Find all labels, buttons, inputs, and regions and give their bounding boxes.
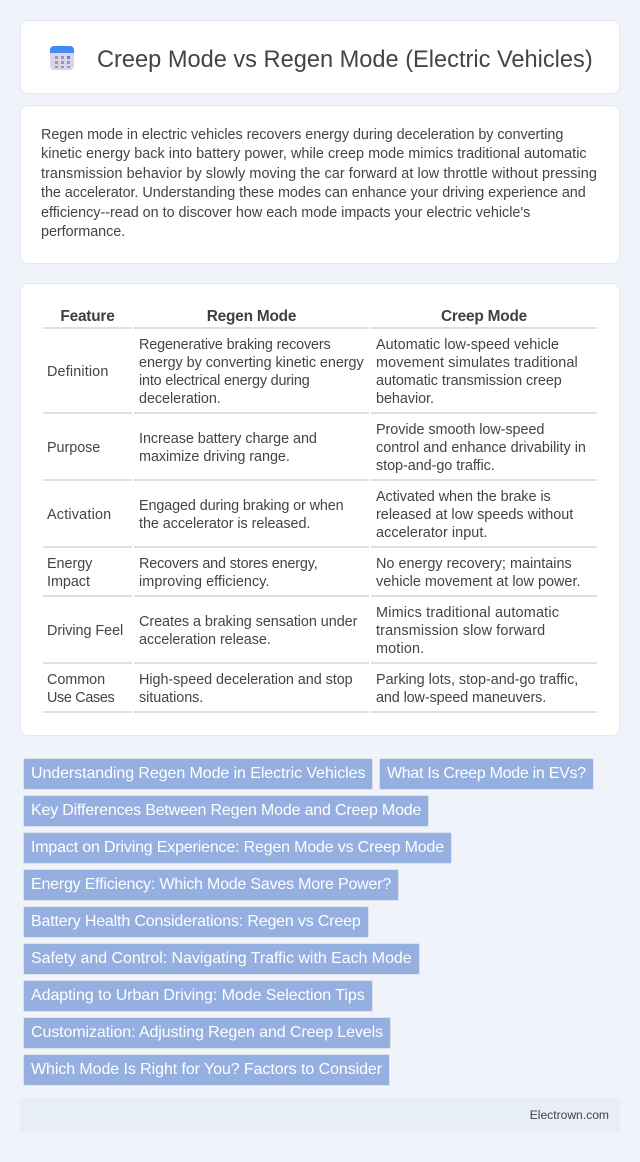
- row: definition: behavior.: [376, 391, 434, 407]
- tag: [23, 906, 369, 938]
- title: Creep Mode vs Regen Mode (Electric Vehicles): [97, 47, 593, 73]
- row: definition: into electrical energy during: [139, 373, 310, 389]
- row: activation: Engaged during braking or when: [139, 498, 344, 514]
- row: driving feel: transmission slow forward: [376, 623, 545, 639]
- row: common use cases: High-speed deceleration and stop: [139, 672, 353, 688]
- tag: Impact on Driving Experience: Regen Mode vs Creep Mode: [31, 839, 444, 856]
- row: common use cases: and low-speed maneuvers.: [376, 690, 546, 706]
- row: purpose: maximize driving range.: [139, 449, 290, 465]
- row: activation: released at low speeds without: [376, 507, 573, 523]
- tag: [23, 1054, 390, 1086]
- tag: [23, 1017, 391, 1049]
- row: purpose: Purpose: [47, 440, 100, 456]
- row: purpose: [47, 422, 586, 474]
- panel: comparison table: [20, 283, 620, 736]
- tag: [23, 980, 373, 1012]
- row: definition: energy by converting kinetic energy: [139, 355, 364, 371]
- table headers: Creep Mode: [441, 308, 527, 325]
- row: driving feel: [47, 605, 559, 657]
- row: definition: movement simulates traditional: [376, 355, 578, 371]
- tag: Adapting to Urban Driving: Mode Selection Tips: [31, 987, 365, 1004]
- tag: Safety and Control: Navigating Traffic with Each Mode: [31, 950, 412, 967]
- tag: [23, 758, 373, 790]
- row: driving feel: motion.: [376, 641, 424, 657]
- table headers: Feature: [60, 308, 115, 325]
- row: common use cases: [47, 672, 578, 706]
- row: driving feel: Driving Feel: [47, 623, 123, 639]
- row: definition: Regenerative braking recovers: [139, 337, 331, 353]
- row: purpose: stop-and-go traffic.: [376, 458, 495, 474]
- intro text: transmission behavior by slowly moving the car forward at low throttle without pressing: [41, 166, 597, 182]
- row: driving feel: Creates a braking sensation under: [139, 614, 357, 630]
- row: energy impact: Impact: [47, 574, 90, 590]
- row: energy impact: Recovers and stores energy,: [139, 556, 318, 572]
- tag: Customization: Adjusting Regen and Creep Levels: [31, 1024, 383, 1041]
- footer text: Electrown.com: [530, 1108, 609, 1122]
- row: energy impact: No energy recovery; maintains: [376, 556, 572, 572]
- intro panel: [20, 105, 620, 264]
- row: activation: Activated when the brake is: [376, 489, 551, 505]
- tag: Understanding Regen Mode in Electric Vehicles: [31, 765, 365, 782]
- row: definition: [47, 337, 578, 407]
- row: purpose: control and enhance drivability in: [376, 440, 586, 456]
- icon: calendar: [50, 46, 74, 70]
- row: definition: Definition: [47, 364, 108, 380]
- intro text: [41, 127, 597, 240]
- intro text: the accelerator. Understanding these modes can enhance your driving experience and: [41, 185, 586, 201]
- row: energy impact: improving efficiency.: [139, 574, 270, 590]
- row: definition: Automatic low-speed vehicle: [376, 337, 559, 353]
- row: driving feel: Mimics traditional automatic: [376, 605, 559, 621]
- row: purpose: Provide smooth low-speed: [376, 422, 544, 438]
- tag: [23, 795, 429, 827]
- row: common use cases: situations.: [139, 690, 203, 706]
- row: definition: automatic transmission creep: [376, 373, 562, 389]
- tag: Energy Efficiency: Which Mode Saves More Power?: [31, 876, 391, 893]
- tag: Battery Health Considerations: Regen vs Creep: [31, 913, 361, 930]
- row: activation: [47, 489, 574, 541]
- table headers: Regen Mode: [207, 308, 296, 325]
- row: activation: the accelerator is released.: [139, 516, 310, 532]
- row: common use cases: Parking lots, stop-and-go traffic,: [376, 672, 578, 688]
- tag: [23, 869, 399, 901]
- row: purpose: Increase battery charge and: [139, 431, 317, 447]
- row: activation: accelerator input.: [376, 525, 487, 541]
- tag: [23, 832, 452, 864]
- footer: [20, 1098, 620, 1132]
- row: energy impact: vehicle movement at low power.: [376, 574, 580, 590]
- tag: Key Differences Between Regen Mode and Creep Mode: [31, 802, 421, 819]
- intro text: performance.: [41, 224, 125, 240]
- table headers: [60, 308, 527, 325]
- row: definition: deceleration.: [139, 391, 221, 407]
- tag: [23, 943, 420, 975]
- intro text: Regen mode in electric vehicles recovers energy during deceleration by converting: [41, 127, 563, 143]
- intro text: kinetic energy back into battery power, while creep mode mimics traditional automatic: [41, 146, 587, 162]
- row: energy impact: [47, 556, 580, 590]
- header card: [20, 20, 620, 94]
- row: common use cases: Use Cases: [47, 690, 114, 706]
- row: energy impact: Energy: [47, 556, 92, 572]
- row: common use cases: Common: [47, 672, 105, 688]
- row: driving feel: acceleration release.: [139, 632, 271, 648]
- tag: What Is Creep Mode in EVs?: [387, 765, 586, 782]
- intro text: efficiency--read on to discover how each mode impacts your electric vehicle's: [41, 205, 530, 221]
- tag: [379, 758, 594, 790]
- row: activation: Activation: [47, 507, 111, 523]
- tag: Which Mode Is Right for You? Factors to Consider: [31, 1061, 382, 1078]
